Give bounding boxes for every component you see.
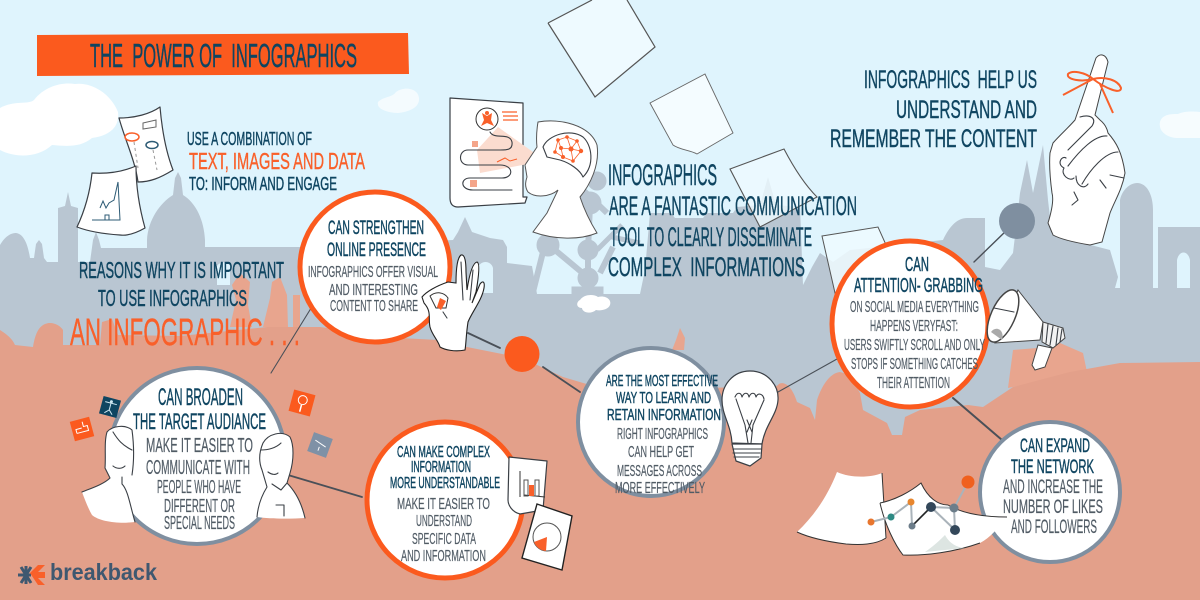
panel: can strengthen online presence: AND INTERESTING [329,282,418,299]
panel: most effective way to learn: MESSAGES ACROSS [617,463,702,480]
panel: can expand the network: AND FOLLOWERS [1011,517,1097,538]
cloud: right [1160,112,1200,138]
panel: can attention-grabbing [832,241,988,407]
heading: reasons why: AN INFOGRAPHIC . . . [70,312,300,354]
icon: OK hand [422,255,484,351]
text: infographics are a fantastic tool [608,159,857,282]
panel: can strengthen online presence [300,192,450,342]
icon: hand with ribbon on finger [1048,55,1125,245]
panel: can attention-grabbing: ATTENTION- GRABBING [854,275,983,297]
panel: can broaden the target audience: THE TARGET AUDIANCE [133,409,266,434]
panel: can expand the network: THE NETWORK [1011,457,1094,478]
heading: reasons why: TO USE INFOGRAPHICS [98,285,247,311]
skyline windows [217,252,1190,293]
panel: can attention-grabbing: CAN [905,254,929,276]
panel: can attention-grabbing: THEIR ATTENTION [877,375,950,392]
panel: can broaden the target audience: COMMUNICATE WITH [146,457,250,479]
illustration: two sketched documents [77,107,173,235]
panel: can strengthen online presence: CONTENT TO SHARE [330,298,418,315]
panel: most effective way to learn [578,348,724,497]
icon: bar chart and pie chart pages [508,457,572,570]
text: use a combination: TEXT, IMAGES AND DATA [189,148,365,174]
icon: megaphone [981,286,1065,370]
panel: can attention-grabbing: STOPS IF SOMETHING CATCHES [851,356,978,373]
salmon skyline figures [230,273,1087,388]
panel: can make complex information understandable: AND INFORMATION [401,548,486,565]
text: use a combination: USE A COMBINATION OF [187,129,312,149]
panel: can expand the network [980,422,1120,562]
panel: most effective way to learn: WAY TO LEARN AND [616,390,711,407]
panel: can attention-grabbing: ON SOCIAL MEDIA EVERYTHING [850,299,979,316]
connector lines [271,230,1007,497]
icon: grey square [307,432,333,458]
text: use a combination: TO: INFORM AND ENGAGE [189,174,337,194]
panel: can make complex information understandable: INFORMATION [411,459,471,476]
text: infographics help us [830,66,1037,153]
panel: can make complex information understandable [367,422,523,578]
panel: most effective way to learn: RIGHT INFOGRAPHICS [617,426,708,443]
cloud: small centre [378,89,419,113]
falling sheets of paper [548,0,887,293]
panel: can strengthen online presence: INFOGRAPHICS OFFER VISUAL [308,264,438,281]
panel: can make complex information understandable: CAN MAKE COMPLEX [397,444,490,461]
text: infographics are a fantastic tool: TOOL TO CLEARLY DISSEMINATE [610,222,812,252]
panel: can strengthen online presence: CAN STRENGTHEN [328,218,424,239]
panel: can make complex information understandable: UNDERSTAND [416,513,472,530]
node: orange dot [504,336,540,372]
illustration: head with brain network [525,121,598,238]
panel: can expand the network: CAN EXPAND [1020,436,1090,457]
icon: orange magnifier square [289,390,315,416]
text: infographics help us: REMEMBER THE CONTENT [830,125,1037,153]
text: infographics help us: UNDERSTAND AND [896,96,1037,124]
panel: can attention-grabbing: HAPPENS VERYFAST: [870,318,958,335]
panel: can broaden the target audience: SPECIAL NEEDS [164,513,235,533]
illustration: network map pages [797,472,1007,555]
title banner [37,33,409,76]
panel: can expand the network: AND INCREASE THE [1003,477,1103,498]
panel: can make complex information understandable: MORE UNDERSTANDABLE [390,475,500,492]
panel: can make complex information understandable: SPECIFIC DATA [412,531,476,548]
text: infographics are a fantastic tool: ARE A FANTASTIC COMMUNICATION [609,191,857,221]
text: infographics are a fantastic tool: COMPLEX INFORMATIONS [608,252,805,282]
panel: can broaden the target audience [109,368,285,544]
heading: reasons why: REASONS WHY IT IS IMPORTANT [79,257,284,283]
illustration: infographic document [450,98,540,207]
panel: most effective way to learn: MORE EFFECTIVELY [615,480,705,497]
panel: most effective way to learn: RETAIN INFORMATION [607,407,721,424]
node: grey dot [999,203,1035,239]
panel: can make complex information understandable: MAKE IT EASIER TO [397,496,490,513]
text: infographics help us: INFOGRAPHICS HELP US [864,66,1037,94]
icon: woman portrait [82,426,135,523]
text: infographics are a fantastic tool: INFOGRAPHICS [608,159,717,192]
logo: breakback: breakback [50,559,157,585]
panel: can attention-grabbing: USERS SWIFTLY SCROLL AND ONLY [844,337,985,354]
icon: light bulb [722,371,778,466]
panel: can strengthen online presence: ONLINE PRESENCE [327,240,426,261]
title banner: THE POWER OF INFOGRAPHICS [90,37,357,74]
icon: man portrait [257,433,305,519]
panel: can expand the network: NUMBER OF LIKES [1003,497,1103,518]
atomium monument [533,172,640,296]
panel: can broaden the target audience: DIFFERENT OR [164,496,235,516]
icon: orange hand square [70,417,94,441]
panel: can broaden the target audience: CAN BROADEN [158,384,243,411]
panel: can broaden the target audience: PEOPLE WHO HAVE [157,477,241,497]
icon: dark accessibility square [99,396,121,418]
cloud: under atomium [577,295,610,313]
panel: most effective way to learn: CAN HELP GET [628,444,694,461]
heading: reasons why [70,257,300,354]
cloud: left [0,84,118,155]
panel: most effective way to learn: ARE THE MOST EFFECTIVE [606,373,718,390]
skyline silhouette [0,145,1200,460]
text: use a combination [187,129,365,194]
panel: can broaden the target audience: MAKE IT EASIER TO [146,435,253,457]
ground [0,319,1200,600]
